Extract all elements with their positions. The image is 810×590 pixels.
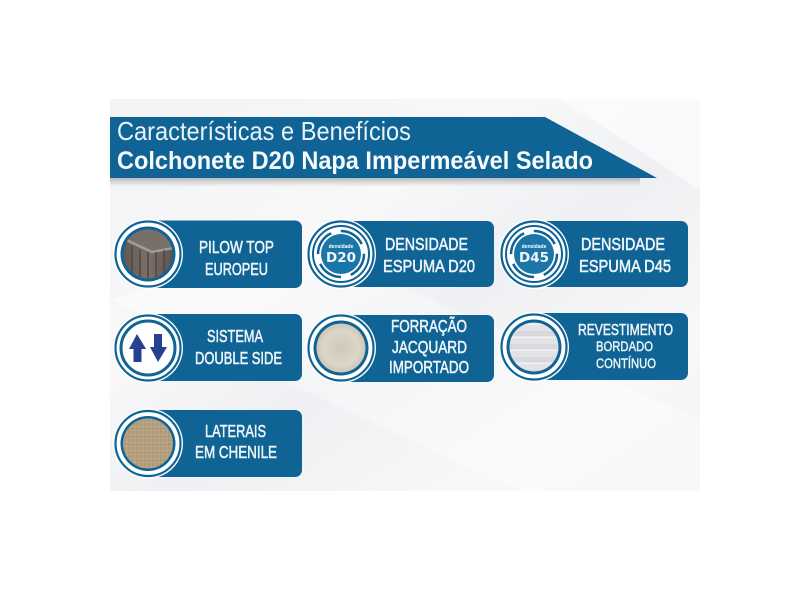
icon: density D45 badge (511, 231, 557, 277)
label: DENSIDADE (385, 234, 468, 254)
label: SISTEMA (207, 326, 263, 346)
title line 2: Colchonete D20 Napa Impermeável Selado (117, 147, 593, 175)
background panel (110, 99, 700, 491)
label: FORRAÇÃO (391, 315, 467, 336)
label (195, 421, 277, 462)
icon: quilted cover (510, 322, 558, 372)
label: IMPORTADO (389, 357, 469, 377)
label: REVESTIMENTO (578, 322, 673, 339)
icon: density D45 badge: D45 (519, 250, 549, 266)
label: CONTÍNUO (596, 356, 656, 371)
label: BORDADO (596, 339, 653, 354)
label (199, 237, 274, 279)
label: EUROPEU (205, 259, 268, 279)
label (195, 326, 282, 368)
card: Densidade D20 (306, 219, 494, 289)
icon: mattress corner (124, 230, 172, 278)
card: Densidade D45 (499, 219, 688, 289)
card: Forração Jacquard Importado (306, 313, 494, 383)
label: DOUBLE SIDE (195, 348, 282, 368)
label (383, 234, 475, 276)
icon: density D20 badge (318, 231, 364, 277)
icon: up and down arrows (129, 334, 167, 362)
label: EM CHENILE (195, 442, 277, 462)
title line 1: Características e Benefícios (117, 116, 411, 146)
title banner (110, 116, 657, 187)
label (579, 234, 671, 276)
label: LATERAIS (205, 421, 266, 441)
label: PILOW TOP (199, 237, 274, 257)
card: Revestimento Bordado Contínuo (499, 312, 688, 382)
label: ESPUMA D20 (383, 256, 475, 276)
label (578, 322, 673, 371)
card: Laterais em Chenile (113, 408, 302, 478)
card: Sistema Double Side (113, 313, 302, 383)
icon: density D45 badge: densidade (522, 244, 547, 250)
icon: jacquard fabric (316, 324, 366, 372)
label: DENSIDADE (581, 234, 665, 254)
icon: density D20 badge: D20 (326, 250, 356, 266)
label: JACQUARD (392, 337, 467, 357)
icon: chenille fabric (123, 418, 173, 468)
icon: density D20 badge: densidade (329, 244, 354, 250)
card: Pilow Top Europeu (113, 219, 302, 289)
label: ESPUMA D45 (579, 256, 671, 276)
label (389, 315, 469, 377)
